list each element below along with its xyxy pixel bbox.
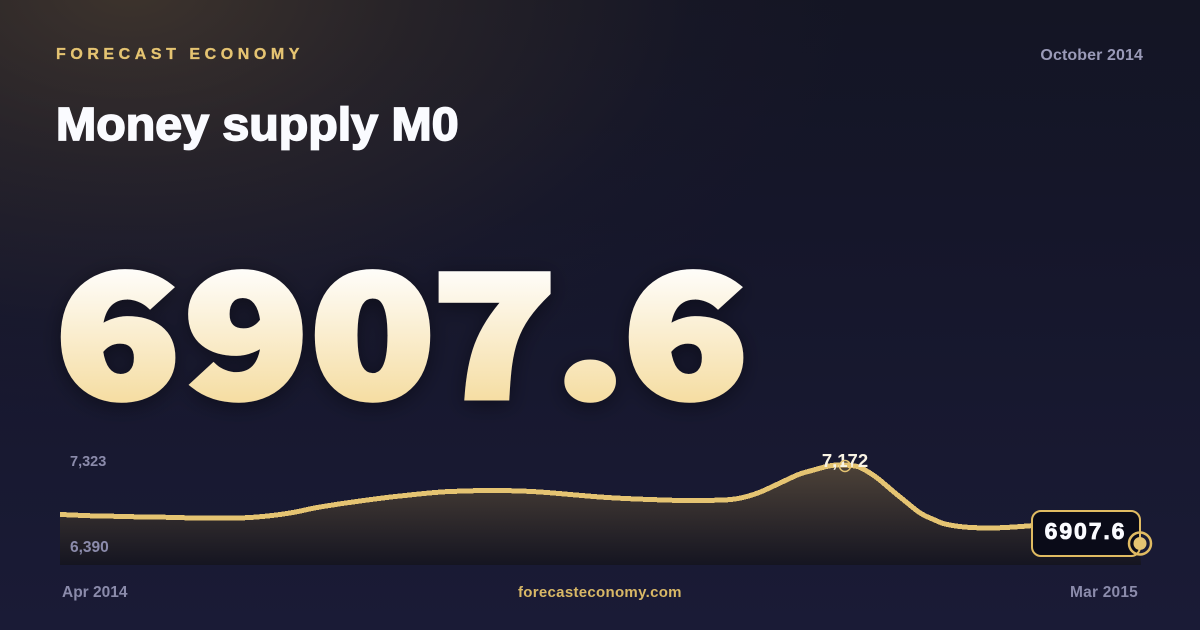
headline value: 6907.6 [56,207,747,440]
peak marker [840,460,850,472]
current value badge [1032,511,1140,556]
end date: Mar 2015 [1070,584,1138,601]
trend line [60,465,1040,528]
source site: forecasteconomy.com [518,584,682,601]
axis maximum: 7,323 [70,454,106,470]
brand eyebrow: FORECAST ECONOMY [56,46,304,63]
area fill [60,465,1141,565]
report date: October 2014 [1040,47,1143,64]
peak label: 7,172 [822,450,868,471]
start date: Apr 2014 [62,584,127,601]
latest point marker [1129,532,1151,554]
current value badge: 6907.6 [1045,518,1126,544]
title: Money supply M0 [56,98,459,150]
axis minimum: 6,390 [70,539,109,556]
